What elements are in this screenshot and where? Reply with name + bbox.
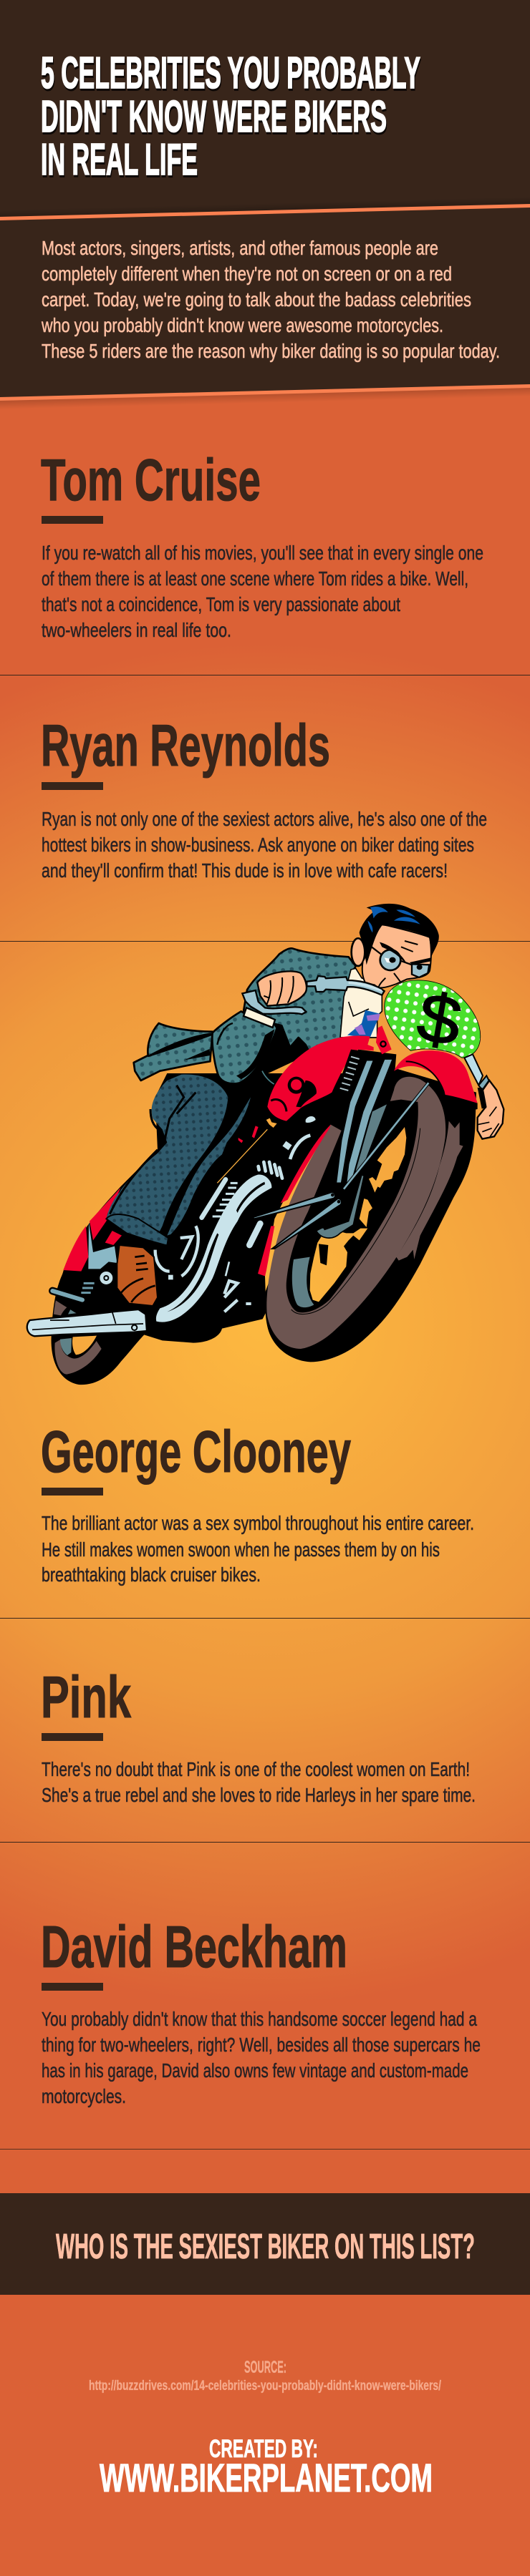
title: IN REAL LIFE [41,135,198,185]
heading: Pink: Pink [41,1664,132,1730]
jacket sleeve [212,1011,277,1084]
front fender [394,1050,478,1103]
dollar sign: $ [412,977,467,1061]
heading bar [42,782,103,790]
headlight shield with dollar sign [385,977,481,1061]
trousers and boot [106,1075,251,1306]
red strip by wheel [258,1125,331,1276]
rear wheel [52,1270,145,1385]
jacket tail [134,1023,213,1080]
panel: Pink [41,1664,476,1806]
intro text [41,237,500,362]
wheel openings [369,1127,406,1193]
heading: Tom Cruise: Tom Cruise [41,447,261,513]
left hand [257,971,307,1006]
suspension spring [334,1050,360,1100]
text: David Beckham: motorcycles. [42,2085,126,2107]
right hand and fork arm [464,1054,504,1139]
left hand and handlebar [242,971,385,1028]
text: Ryan Reynolds [42,808,487,882]
heading bar [42,1733,103,1741]
illustration: biker on motorcycle [27,904,504,1385]
glasses [370,946,429,977]
exhaust muffler [27,1309,147,1336]
handlebar [307,976,385,995]
face [362,924,431,987]
heading bar [42,1488,103,1496]
panel: George Clooney [41,1418,474,1586]
rear bracket and hub [88,1222,117,1269]
lower fork linkage [252,1175,364,1249]
rear fender [63,1226,88,1272]
motorcycle tank [266,1025,478,1189]
jacket body [244,948,356,1064]
panel: header [0,0,530,412]
ear [352,938,365,966]
foot peg [52,1291,82,1300]
shirt cuff [244,1008,275,1028]
necktie [347,1010,380,1038]
engine details [202,1179,226,1218]
footer: credits [100,2435,433,2500]
panel: question banner [0,2193,530,2295]
panel: Ryan Reynolds [41,712,487,882]
text: Tom Cruise: that's not a coincidence, Tom is very passionate about [42,593,400,615]
heading bar [42,1983,103,1991]
text: Tom Cruise [42,542,483,641]
panel: Tom Cruise [41,447,483,641]
hair [360,904,439,965]
footer: credits: CREATED BY: [209,2435,318,2463]
text: George Clooney [42,1512,474,1586]
shirt [340,968,382,1038]
heading bar [42,516,103,524]
brake lever [242,990,306,1014]
panel: David Beckham [41,1913,481,2107]
text: Tom Cruise: two-wheelers in real life too. [42,619,231,641]
text: Pink [42,1758,476,1806]
exhaust pipe [156,1174,271,1322]
footer: source: SOURCE: [244,2358,286,2377]
jacket [134,948,356,1084]
fork strut [344,1083,428,1189]
front wheel [265,1068,476,1362]
heading: David Beckham: David Beckham [41,1913,347,1980]
footer: source [89,2358,442,2394]
heading: George Clooney: George Clooney [41,1418,351,1485]
title [41,49,420,185]
heading: Ryan Reynolds: Ryan Reynolds [41,712,330,779]
text: George Clooney: breathtaking black cruiser bikes. [42,1563,261,1586]
front fork tubes [336,1060,374,1183]
rider head and shirt [340,904,439,1038]
text: David Beckham [42,2008,481,2107]
neck bracket [376,1025,392,1054]
engine and frame silhouette [27,1073,372,1343]
